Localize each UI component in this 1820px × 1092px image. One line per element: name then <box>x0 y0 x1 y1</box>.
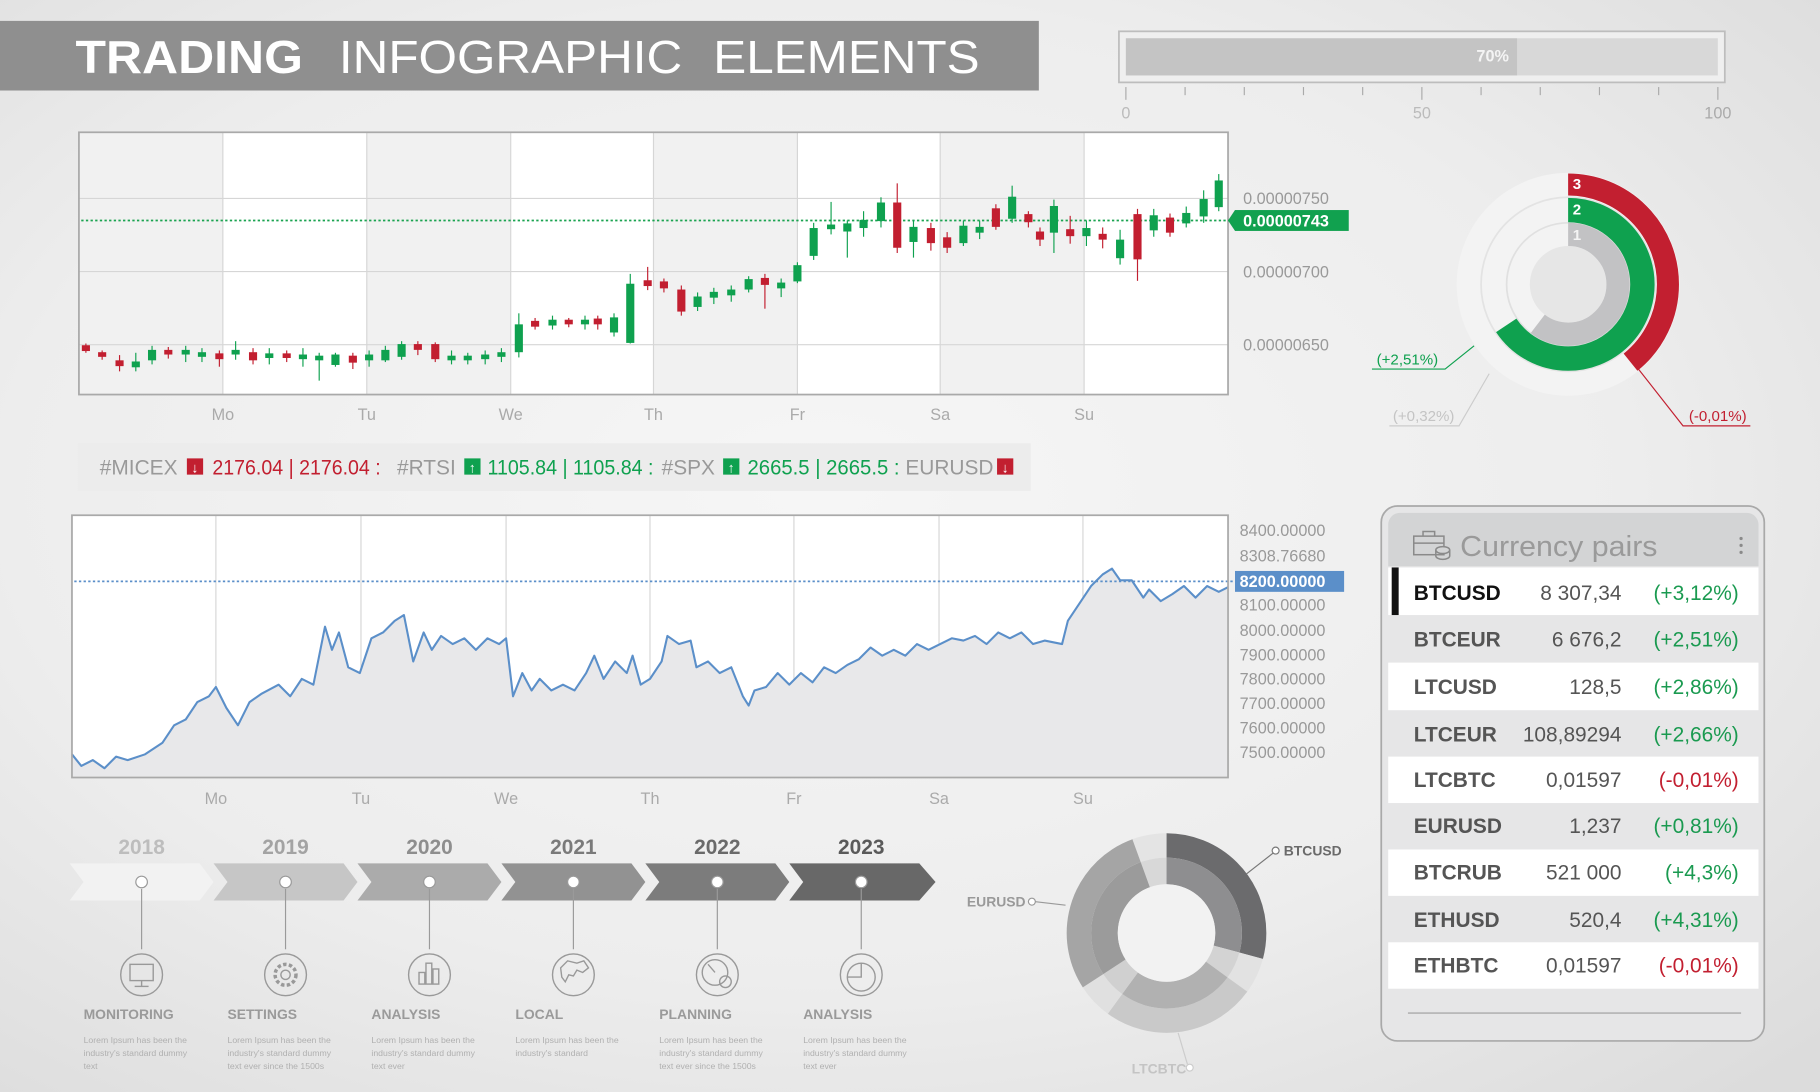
line chart: 8100.00000 <box>1240 596 1325 614</box>
line chart: Su <box>1073 790 1093 808</box>
panel: currency pairs <box>1381 506 1764 1041</box>
donut chart: LTCBTC <box>1132 1060 1186 1076</box>
title: INFOGRAPHIC ELEMENTS <box>339 31 980 83</box>
table rows: BTCUSD <box>1414 582 1501 605</box>
line chart: 7600.00000 <box>1240 719 1325 737</box>
ring chart: (+0,32%) <box>1393 408 1454 425</box>
timeline: industry's standard dummy <box>84 1048 188 1058</box>
icons <box>121 954 882 996</box>
donut chart <box>967 811 1342 1076</box>
line chart: Tu <box>352 790 370 808</box>
line chart: 7900.00000 <box>1240 646 1325 664</box>
table rows: LTCUSD <box>1414 676 1497 699</box>
table rows: 0,01597 <box>1546 954 1622 977</box>
line chart: 8400.00000 <box>1240 522 1325 540</box>
day labels: Fr <box>790 406 806 424</box>
timeline: ANALYSIS <box>803 1006 872 1022</box>
table rows: 8 307,34 <box>1540 582 1622 605</box>
line chart: Mo <box>205 790 227 808</box>
timeline: SETTINGS <box>228 1006 297 1022</box>
line chart: Fr <box>786 790 802 808</box>
day labels: Sa <box>930 406 951 424</box>
table rows: (+4,3%) <box>1665 862 1739 885</box>
timeline: industry's standard dummy <box>659 1048 763 1058</box>
line chart: 8200.00000 <box>1240 573 1325 591</box>
candlestick chart <box>79 132 1349 424</box>
line chart: 7700.00000 <box>1240 695 1325 713</box>
line chart: Sa <box>929 790 950 808</box>
timeline: text ever <box>371 1061 405 1071</box>
timeline: Lorem Ipsum has been the <box>84 1035 187 1045</box>
line chart: Th <box>641 790 659 808</box>
panel header: Currency pairs <box>1460 531 1657 563</box>
line chart: 8308.76680 <box>1240 548 1325 566</box>
table rows: (+4,31%) <box>1653 909 1739 932</box>
timeline: 2022 <box>694 836 741 859</box>
ticker bar: ↑ <box>728 459 735 475</box>
table rows: (+2,86%) <box>1653 676 1739 699</box>
timeline: Lorem Ipsum has been the <box>659 1035 763 1045</box>
price labels: 0.00000750 <box>1243 190 1329 208</box>
timeline: LOCAL <box>515 1006 564 1022</box>
timeline: 2023 <box>838 836 884 859</box>
timeline: industry's standard dummy <box>803 1048 907 1058</box>
progress bar 70%: 50 <box>1413 104 1431 122</box>
donut chart: EURUSD <box>967 893 1026 909</box>
timeline: PLANNING <box>659 1006 732 1022</box>
ring chart: 3 <box>1573 176 1581 193</box>
day labels: Mo <box>212 406 234 424</box>
ring chart <box>1372 173 1750 426</box>
table rows: ETHUSD <box>1414 909 1500 932</box>
ticker bar: #RTSI <box>397 457 456 480</box>
progress bar 70% <box>1119 31 1731 122</box>
ring chart: (-0,01%) <box>1689 408 1747 425</box>
table rows: LTCEUR <box>1414 724 1497 747</box>
progress bar 70%: 0 <box>1121 104 1130 122</box>
day labels: Tu <box>358 406 376 424</box>
timeline: 2021 <box>550 836 597 859</box>
title: TRADING <box>75 31 303 83</box>
day labels <box>212 406 1094 424</box>
day labels: Th <box>644 406 663 424</box>
timeline: text <box>84 1061 98 1071</box>
timeline: ANALYSIS <box>371 1006 440 1022</box>
table rows: 0,01597 <box>1546 769 1622 792</box>
timeline: industry's standard <box>515 1048 588 1058</box>
day labels: Su <box>1074 406 1094 424</box>
timeline: 2019 <box>262 836 309 859</box>
table rows: (+0,81%) <box>1653 815 1739 838</box>
ring chart: 2 <box>1573 202 1581 219</box>
ticker bar: EURUSD <box>905 457 994 480</box>
candlestick chart: 0.00000743 <box>1243 212 1329 230</box>
table rows: LTCBTC <box>1414 769 1496 792</box>
timeline: text ever <box>803 1061 837 1071</box>
table rows: BTCEUR <box>1414 628 1501 651</box>
timeline: Lorem Ipsum has been the <box>228 1035 331 1045</box>
day labels: We <box>499 406 523 424</box>
line chart: 7800.00000 <box>1240 671 1325 689</box>
candles <box>82 174 1222 381</box>
progress bar 70%: 100 <box>1704 104 1731 122</box>
ticker bar: ↑ <box>469 459 476 475</box>
donut chart: BTCUSD <box>1284 842 1342 858</box>
timeline: industry's standard dummy <box>228 1048 332 1058</box>
table rows: 521 000 <box>1546 862 1622 885</box>
timeline: 2020 <box>406 836 453 859</box>
table rows: ETHBTC <box>1414 954 1498 977</box>
line chart <box>72 515 1344 808</box>
table rows: EURUSD <box>1414 815 1502 838</box>
timeline: 2018 <box>118 836 165 859</box>
timeline: text ever since the 1500s <box>228 1061 325 1071</box>
table rows: (+2,66%) <box>1653 724 1739 747</box>
table rows: 6 676,2 <box>1552 628 1622 651</box>
line chart: 7500.00000 <box>1240 744 1325 762</box>
ring chart: (+2,51%) <box>1377 351 1438 368</box>
ticker bar: #MICEX <box>100 457 178 480</box>
table rows: (+3,12%) <box>1653 582 1739 605</box>
table rows: (+2,51%) <box>1653 628 1739 651</box>
timeline <box>70 836 936 1071</box>
line chart: 8000.00000 <box>1240 622 1325 640</box>
table rows: 108,89294 <box>1523 724 1622 747</box>
candlestick chart: 0.00000650 <box>1243 336 1329 354</box>
timeline: MONITORING <box>84 1006 174 1022</box>
ticker bar: ↓ <box>1002 459 1009 475</box>
ticker bar: 1105.84 | 1105.84 : <box>488 457 653 480</box>
timeline: text ever since the 1500s <box>659 1061 757 1071</box>
ring chart: 1 <box>1573 227 1581 244</box>
timeline: Lorem Ipsum has been the <box>371 1035 475 1045</box>
table rows: 1,237 <box>1569 815 1622 838</box>
ticker bar: 2665.5 | 2665.5 : <box>748 457 900 480</box>
table rows: 128,5 <box>1569 676 1622 699</box>
ticker bar: 2176.04 | 2176.04 : <box>212 457 381 480</box>
line chart: We <box>494 790 518 808</box>
timeline: Lorem Ipsum has been the <box>803 1035 907 1045</box>
table rows <box>1388 567 1758 989</box>
candlestick chart: 0.00000700 <box>1243 263 1329 281</box>
panel header <box>1388 513 1758 566</box>
table rows: 520,4 <box>1569 909 1622 932</box>
table rows: (-0,01%) <box>1659 769 1739 792</box>
ticker bar <box>78 443 1031 491</box>
table rows: (-0,01%) <box>1659 954 1739 977</box>
timeline: industry's standard dummy <box>371 1048 476 1058</box>
timeline: Lorem Ipsum has been the <box>515 1035 619 1045</box>
table rows: BTCRUB <box>1414 862 1502 885</box>
title <box>0 21 1039 91</box>
progress bar 70%: 70% <box>1476 48 1509 66</box>
ticker bar: #SPX <box>662 457 715 480</box>
ticker bar: ↓ <box>192 459 198 475</box>
